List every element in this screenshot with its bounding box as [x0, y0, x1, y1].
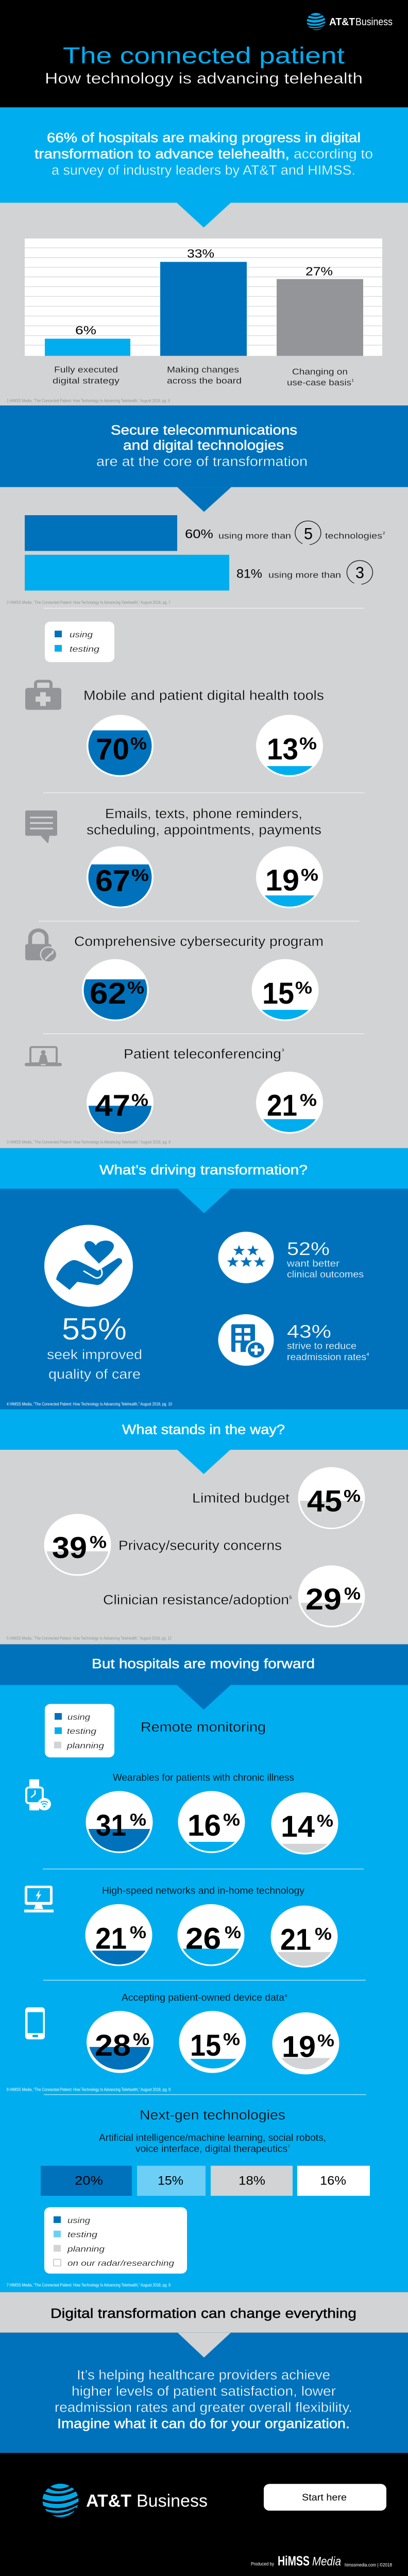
heading: patient-owned data: Accepting patient-owned device data [122, 1992, 285, 2003]
row: patient-owned device data [25, 1992, 339, 2074]
credit: produced by HIMSS Media [251, 2554, 392, 2568]
arrow: closing pointer [178, 2333, 231, 2358]
stat: testing 19% [256, 846, 323, 908]
stat: testing 26%: % [225, 1923, 241, 1942]
stat: clinician resistance/adoption 29%: % [344, 1585, 361, 1603]
stat: using 47%: % [131, 1091, 148, 1110]
row: wearables [26, 1772, 338, 1855]
icon: smartphone [25, 2007, 45, 2039]
bar: 60% using more than 5: technologies [325, 531, 382, 540]
stat: using 31%: % [130, 1811, 146, 1829]
stat: 55% seek improved quality of care [47, 1312, 142, 1382]
panel: what's driving transformation heading [0, 1148, 408, 1189]
stat: limited budget 45%: % [344, 1487, 361, 1506]
stat: testing 21%: % [300, 1091, 317, 1110]
bar: 81% using more than 3 [25, 555, 372, 590]
stat: testing 26% [177, 1904, 244, 1966]
text: 66% of hospitals statement: 66% of hospitals are making progress in digital [47, 130, 361, 145]
stat: using 67%: % [131, 866, 149, 885]
stat: using 31%: 31 [96, 1808, 126, 1842]
footnote 3: 3 HIMSS Media, “The Connected Patient: How Technology Is Advancing Telehealth,” August 2018, pg. 8 [7, 1140, 171, 1144]
box: testing 15%: 15% [158, 2174, 183, 2188]
heading: are at the core of transformation [96, 454, 308, 469]
stat: using 47%: 47 [95, 1089, 130, 1122]
panel: footer [0, 2453, 408, 2576]
icon: five stars [218, 1232, 274, 1283]
legend: planning [67, 2245, 105, 2253]
text: closing message: readmission rates and greater overall flexibility. [55, 2400, 352, 2415]
legend: testing [70, 645, 99, 654]
heading: remote monitoring: Remote monitoring [141, 1720, 266, 1735]
bar: 81% using more than 3: 3 [355, 563, 364, 582]
stat: testing 16% [178, 1791, 245, 1853]
heading: emails and scheduling: Emails, texts, phone reminders, [105, 806, 302, 821]
stat: using 28% [87, 2011, 154, 2073]
bar: 60% using more than 5: 2 [383, 531, 385, 535]
text: 66% of hospitals statement: according to [294, 146, 373, 161]
stat: using 62% [82, 959, 149, 1021]
stat: privacy/security concerns 39%: Privacy/security concerns [118, 1538, 282, 1553]
bar: 6% [45, 338, 130, 356]
label: making changes: Making changes [167, 365, 239, 375]
text: 66% of hospitals statement: transformation to advance telehealth, [35, 146, 290, 161]
credit: produced by HIMSS Media: HiMSS [278, 2554, 310, 2568]
stat: planning 19%: % [317, 2031, 334, 2050]
text: next-gen description: Artificial intelligence/machine learning, social robots, [99, 2132, 326, 2143]
heading: and digital technologies [123, 438, 284, 453]
heading: Digital transformation can change everything [50, 2306, 356, 2321]
row: high-speed networks [24, 1886, 338, 1968]
stat: 52% want better clinical outcomes [286, 1239, 364, 1280]
heading: But hospitals are moving forward [92, 1656, 315, 1671]
bar: 81% using more than 3: 81% [236, 567, 262, 581]
label: making changes [167, 365, 242, 385]
stat: using 28%: % [133, 2030, 149, 2049]
button: start here [264, 2484, 386, 2511]
text: closing message: Imagine what it can do for your organization. [57, 2416, 350, 2431]
logo: AT&T Business large [41, 2484, 208, 2517]
value: 27%: 27% [305, 265, 333, 278]
heading: next-gen technologies: Next-gen technologies [140, 2108, 285, 2123]
credit: produced by HIMSS Media: Produced by [251, 2562, 274, 2567]
stat: 43% strive to reduce readmission rates: 4 [367, 1352, 369, 1357]
text: closing message: higher levels of patient satisfaction, lower [72, 2384, 336, 2399]
legend [45, 621, 114, 662]
icon: padlock with wrench [25, 930, 58, 963]
stat: testing 16%: 16 [188, 1808, 221, 1842]
stat: testing 13% [256, 715, 323, 777]
stat: using 67%: 67 [95, 864, 130, 897]
stat: using 70%: 70 [96, 732, 129, 766]
icon: medical kit [25, 681, 61, 710]
label: fully executed [53, 365, 120, 385]
stat: 43% strive to reduce readmission rates: 43% [287, 1321, 331, 1342]
chart: next-gen adoption boxes [41, 2166, 370, 2196]
value: 6%: 6% [75, 324, 96, 337]
subtitle: How technology is advancing telehealth [45, 70, 363, 87]
label: changing on use-case basis: 1 [352, 378, 354, 383]
stat: testing 15%: % [295, 979, 312, 997]
stat: testing 26%: 26 [185, 1922, 221, 1955]
heading: teleconferencing: Patient teleconferencing [124, 1047, 281, 1061]
label: fully executed: Fully executed [54, 365, 118, 375]
arrow: drivers pointer [178, 1189, 231, 1213]
legend: testing [67, 1727, 96, 1736]
value: 33%: 33% [187, 247, 214, 261]
stat: limited budget 45% [192, 1467, 365, 1529]
bar: 81% using more than 3: using more than [268, 570, 341, 580]
stat: testing 15%: 15 [190, 2028, 221, 2062]
stat: clinician resistance/adoption 29%: 5 [290, 1595, 292, 1600]
stat: testing 19%: 19 [265, 863, 299, 897]
credit: produced by HIMSS Media: Media [312, 2554, 341, 2568]
credit: produced by HIMSS Media: himssmedia.com | ©2018 [345, 2563, 392, 2567]
stat: testing 21%: 21 [267, 1089, 297, 1122]
stat: using 28%: 28 [95, 2028, 131, 2062]
heading: Secure telecommunications [111, 422, 297, 437]
row: patient teleconferencing [25, 1047, 323, 1133]
bar: 33% [160, 262, 247, 356]
logo: AT&T Business large: Business [137, 2491, 208, 2511]
stat: 55% seek improved quality of care: quality of care [48, 1367, 141, 1382]
heading: What’s driving transformation? [99, 1163, 308, 1177]
bar: 60% using more than 5: using more than [218, 531, 291, 540]
panel: secure telecommunications heading [0, 405, 408, 487]
stat: using 70% [87, 715, 154, 777]
bar chart: digital transformation progress [25, 239, 382, 356]
footnote 1: 1 HIMSS Media, “The Connected Patient: How Technology Is Advancing Telehealth,” August 2018, pg. 5 [7, 399, 170, 403]
heading: cybersecurity: Comprehensive cybersecurity program [74, 934, 324, 949]
legend: planning [66, 1741, 104, 1750]
heading: mobile tools: Mobile and patient digital health tools [83, 688, 324, 703]
button: start here: Start here [302, 2493, 347, 2503]
label: changing on use-case basis: use-case basis [287, 378, 351, 387]
panel: header [0, 0, 408, 107]
heading: emails and scheduling: scheduling, appointments, payments [87, 822, 321, 837]
stat: testing 15%: 15 [262, 976, 294, 1010]
label: changing on use-case basis: Changing on [292, 366, 348, 377]
stat: testing 13%: % [299, 735, 317, 753]
stat: planning 21% [271, 1906, 338, 1968]
icon: hand holding heart [44, 1225, 133, 1307]
panel: remote monitoring and next-gen [0, 1685, 408, 2292]
footnote 7: 7 HIMSS Media, “The Connected Patient: How Technology Is Advancing Telehealth,” August 2018, pg. 9 [7, 2283, 171, 2287]
stat: 43% strive to reduce readmission rates: readmission rates [287, 1352, 366, 1363]
box: using 20%: 20% [75, 2174, 103, 2188]
stat: testing 16%: % [223, 1811, 240, 1829]
legend: on our radar/researching [67, 2259, 174, 2268]
stat: planning 19% [272, 2012, 339, 2074]
box: testing 15% [137, 2166, 206, 2196]
icon: laptop with person [25, 1047, 62, 1066]
heading: patient-owned data: 6 [285, 1993, 287, 1998]
arrow: barriers pointer [177, 1450, 230, 1474]
logo: AT&T Business [306, 13, 393, 30]
stat: limited budget 45%: 45 [307, 1484, 342, 1518]
bar: 60% using more than 5 [25, 515, 385, 551]
row: mobile and patient digital health tools [25, 681, 324, 777]
stat: using 67% [87, 846, 154, 908]
logo: AT&T Business: AT&T [329, 16, 355, 28]
label: changing on use-case basis [287, 366, 354, 387]
heading: wearables: Wearables for patients with chronic illness [113, 1772, 294, 1783]
stat: 55% seek improved quality of care: seek improved [47, 1347, 142, 1362]
stat: planning 14%: % [317, 1812, 333, 1831]
box: using 20% [41, 2166, 132, 2196]
stat: clinician resistance/adoption 29%: Clinician resistance/adoption [103, 1592, 289, 1607]
text: next-gen description: voice interface, digital therapeutics [135, 2144, 287, 2155]
panel: intro statement [0, 107, 408, 203]
panel: digital transformation heading [0, 2292, 408, 2333]
text: 66% of hospitals statement [35, 130, 373, 178]
stat: testing 13%: 13 [267, 732, 298, 766]
label: fully executed: digital strategy [53, 376, 120, 385]
stat: using 21%: 21 [95, 1922, 127, 1955]
box: researching 16% [297, 2166, 370, 2196]
text: next-gen description: 7 [287, 2144, 290, 2148]
icon: smartwatch with wifi [26, 1780, 51, 1810]
panel: barriers [0, 1450, 408, 1645]
footnote 2: 2 HIMSS Media, “The Connected Patient: How Technology Is Advancing Telehealth,” August 2018, pg. 7 [7, 600, 171, 605]
stat: 52% want better clinical outcomes: want better [286, 1259, 340, 1269]
stat: using 47% [87, 1072, 154, 1133]
icon: speech bubble [25, 810, 57, 843]
heading: What stands in the way? [122, 1422, 285, 1437]
heading: high-speed networks: High-speed networks and in-home technology [102, 1886, 305, 1896]
legend: using [67, 1713, 90, 1722]
legend: testing [67, 2230, 97, 2239]
legend [45, 1704, 114, 1757]
panel: progress chart [0, 203, 408, 405]
stat: privacy/security concerns 39%: % [90, 1533, 107, 1552]
box: planning 18% [211, 2166, 293, 2196]
footnote 6: 6 HIMSS Media, “The Connected Patient: How Technology Is Advancing Telehealth,” August 2018, pg. 9 [7, 2088, 171, 2092]
stat: planning 14% [271, 1792, 338, 1855]
legend: using [67, 2216, 90, 2225]
stat: planning 19%: 19 [282, 2030, 316, 2063]
text: closing message: It’s helping healthcare providers achieve [77, 2367, 330, 2382]
bar: 27% [277, 279, 363, 356]
stat: privacy/security concerns 39%: 39 [52, 1531, 87, 1565]
arrow: moving forward pointer [177, 1685, 231, 1710]
arrow: telecommunications pointer [177, 487, 231, 512]
legend: using [70, 631, 93, 639]
text: next-gen description [99, 2132, 326, 2155]
heading [96, 422, 308, 469]
icon: hospital building [218, 1314, 274, 1366]
bar: 60% using more than 5: 5 [304, 524, 313, 543]
panel: what stands in the way heading [0, 1409, 408, 1450]
panel: drivers [0, 1189, 408, 1409]
logo: AT&T Business large: AT&T [86, 2491, 131, 2511]
row: comprehensive cybersecurity program [25, 930, 324, 1021]
stat: planning 21%: 21 [280, 1922, 311, 1956]
stat: testing 21% [256, 1072, 323, 1133]
arrow: intro pointer [177, 203, 231, 228]
stat: 43% strive to reduce readmission rates: strive to reduce [287, 1341, 356, 1351]
panel: technology adoption [0, 487, 408, 1148]
text: closing message [55, 2367, 352, 2431]
stat: planning 21%: % [315, 1925, 332, 1944]
stat: 52% want better clinical outcomes: clinical outcomes [287, 1269, 364, 1280]
stat: testing 19%: % [301, 866, 318, 885]
footnote 4: 4 HIMSS Media, “The Connected Patient: How Technology Is Advancing Telehealth,” August 2018, pg. 10 [7, 1402, 172, 1406]
bar: 60% using more than 5: 60% [185, 527, 213, 541]
stat: using 70%: % [130, 735, 147, 753]
stat: limited budget 45%: Limited budget [192, 1491, 290, 1505]
stat: 52% want better clinical outcomes: 52% [287, 1239, 330, 1259]
stat: using 21% [86, 1904, 152, 1966]
stat: clinician resistance/adoption 29%: 29 [305, 1582, 342, 1616]
panel: closing statement [0, 2333, 408, 2453]
footnote 5: 5 HIMSS Media, “The Connected Patient: How Technology Is Advancing Telehealth,” August 2018, pg. 12 [7, 1636, 172, 1640]
heading: teleconferencing: 3 [282, 1048, 284, 1053]
stat: using 21%: % [130, 1923, 146, 1942]
stat: testing 15% [251, 959, 318, 1021]
stat: using 62%: 62 [90, 976, 126, 1010]
stat: using 31% [86, 1791, 152, 1853]
stat: testing 15% [179, 2011, 246, 2073]
box: planning 18%: 18% [239, 2174, 265, 2188]
stat: 55% seek improved quality of care: 55% [62, 1312, 127, 1346]
text: 66% of hospitals statement: a survey of industry leaders by AT&T and HIMSS. [52, 163, 355, 178]
stat: planning 14%: 14 [281, 1809, 315, 1843]
stat: privacy/security concerns 39% [44, 1514, 282, 1576]
title: The connected patient [63, 43, 345, 69]
logo: AT&T Business: Business [355, 16, 393, 28]
icon: monitor with bolt [24, 1886, 54, 1912]
box: researching 16%: 16% [320, 2174, 346, 2188]
stat: testing 15%: % [223, 2030, 240, 2049]
panel: moving forward heading [0, 1645, 408, 1685]
stat: using 62%: % [127, 979, 144, 997]
stat: clinician resistance/adoption 29% [103, 1565, 365, 1628]
label: making changes: across the board [167, 376, 242, 385]
row: emails, texts, reminders [25, 806, 323, 908]
legend [44, 2207, 187, 2274]
stat: 43% strive to reduce readmission rates [287, 1321, 369, 1363]
heading: emails and scheduling [87, 806, 321, 837]
